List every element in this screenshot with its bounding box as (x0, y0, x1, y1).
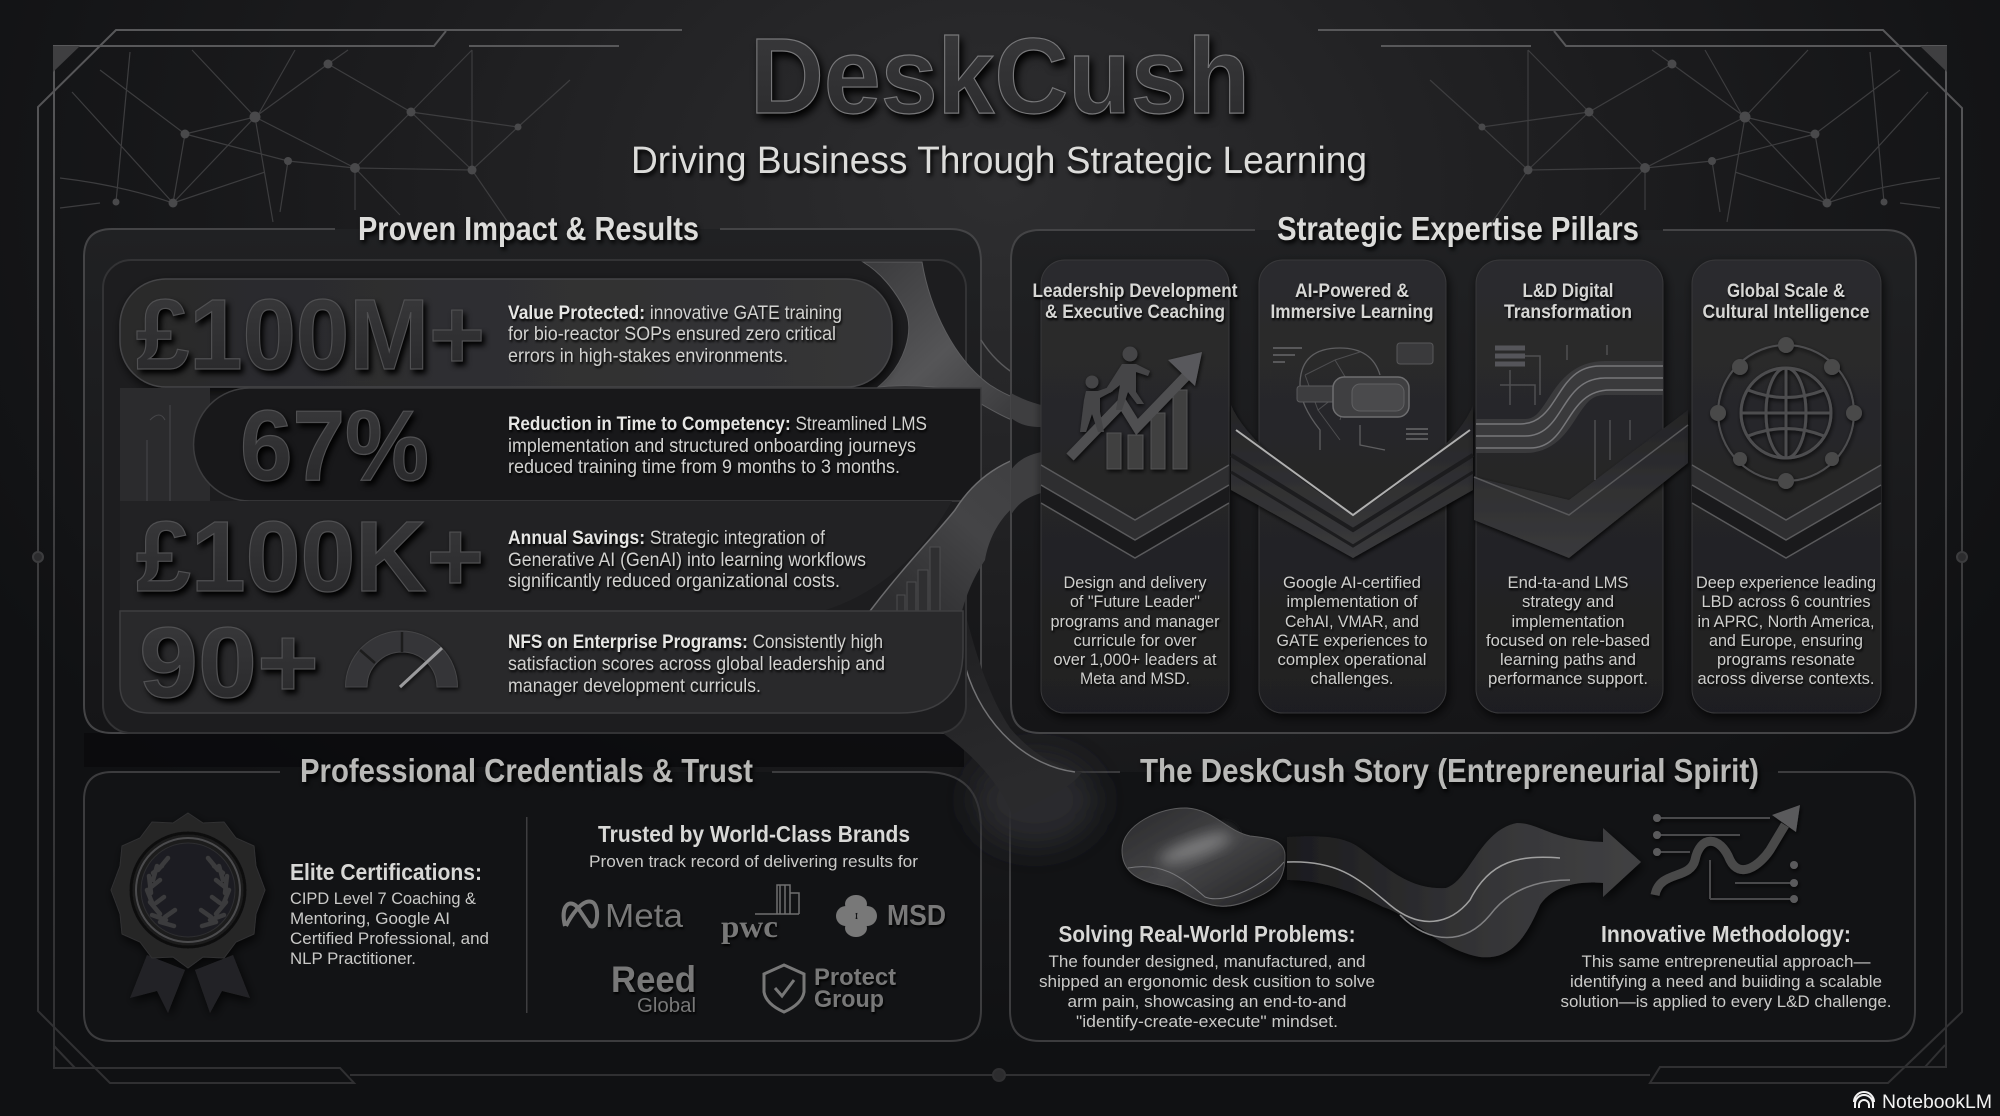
card description: Design and delivery (1064, 573, 1207, 592)
logo: Reed Global: Global (637, 995, 696, 1017)
row: time to competency: reduced training time from 9 months to 3 months. (508, 457, 900, 478)
metric: 100K: £100K+ (136, 501, 484, 613)
row: value protected (120, 279, 892, 391)
icon: award rosette (111, 813, 265, 1013)
card title: L&D Digital (1522, 281, 1614, 302)
logo: Meta (564, 897, 684, 934)
card title: Global Scale & (1727, 281, 1845, 302)
logo: Reed Global: Reed (611, 959, 696, 1000)
heading: proven impact: Proven Impact & Results (358, 210, 699, 247)
icon: globe network (1710, 337, 1862, 489)
heading: pillars: Strategic Expertise Pillars (1277, 210, 1639, 247)
card: digital transformation: strategy and (1522, 592, 1614, 611)
card: leadership development: curricule for over (1074, 631, 1197, 650)
panel outline (84, 229, 981, 733)
row: value protected: errors in high-stakes environments. (508, 346, 788, 367)
card: leadership development: & Executive Ceaching (1045, 302, 1225, 323)
row: annual savings: Generative AI (GenAI) into learning workflows (508, 550, 866, 571)
panel: the DeskCush story (973, 752, 1915, 1041)
card: global scale: across diverse contexts. (1698, 669, 1874, 688)
metric: 90 plus: 90+ (139, 607, 319, 719)
text: solving real-world problems: arm pain, showcasing an end-to-and (1068, 992, 1346, 1011)
text: elite certifications: CIPD Level 7 Coaching & (290, 889, 477, 908)
card: AI-powered learning: implementation of (1286, 592, 1418, 611)
logo: PwC (721, 885, 799, 944)
card description: End-ta-and LMS (1508, 573, 1628, 592)
text: trusted brands: Proven track record of delivering results for (589, 852, 918, 871)
logo: Meta: Meta (605, 897, 684, 934)
panel: proven impact and results (84, 210, 1082, 815)
description: value protected: Value Protected: innovative GATE training (508, 303, 842, 324)
card: digital transformation: performance support. (1488, 669, 1648, 688)
decorative network: top right (1430, 50, 1940, 240)
icon: ergonomic cushion (1122, 808, 1285, 906)
text: trusted brands: Trusted by World-Class Brands (598, 821, 910, 847)
panel outline (84, 772, 981, 1041)
card: digital transformation: focused on rele-based (1486, 631, 1650, 650)
soft sheen where connector meets the story panel (973, 754, 1097, 846)
card: digital transformation: Transformation (1504, 302, 1632, 323)
panel: professional credentials and trust (84, 752, 981, 1041)
chevron band (1474, 410, 1688, 558)
panel outline (1011, 230, 1916, 733)
text: innovative methodology: solution—is applied to every L&D challenge. (1560, 992, 1892, 1011)
icon: VR headset with wireframe head (1273, 343, 1433, 450)
heading: story: The DeskCush Story (Entrepreneurial Spirit) (1140, 752, 1759, 789)
chevrons (1692, 465, 1881, 540)
text: innovative methodology: This same entrepreneutial approach— (1582, 952, 1870, 971)
swoosh: lower connector tail (917, 600, 1082, 815)
card: digital transformation: implementation (1512, 612, 1624, 631)
card: AI-powered learning (1231, 260, 1473, 713)
text: solving real-world problems: shipped an ergonomic desk cusition to solve (1039, 972, 1375, 991)
description: annual savings: Annual Savings: Strategic integration of (508, 528, 826, 549)
text: trusted brands (589, 821, 918, 871)
card: global scale: Cultural Intelligence (1702, 302, 1870, 323)
text: elite certifications: Mentoring, Google AI (290, 909, 450, 928)
results plate (103, 260, 966, 733)
text: innovative methodology: Innovative Methodology: (1601, 921, 1851, 947)
card: AI-powered learning: challenges. (1310, 669, 1394, 688)
card: digital transformation: learning paths and (1500, 650, 1636, 669)
panel: strategic expertise pillars (1011, 210, 1916, 733)
row: annual savings (120, 501, 952, 613)
card: global scale: programs resonate (1717, 650, 1855, 669)
card: leadership development: over 1,000+ leaders at (1054, 650, 1217, 669)
row: time to competency: implementation and structured onboarding journeys (508, 436, 916, 457)
card: leadership development: programs and manager (1050, 612, 1220, 631)
subtitle: Driving Business Through Strategic Learning (631, 140, 1367, 182)
metric: 100M: £100M+ (136, 279, 485, 391)
card description: Deep experience leading (1696, 573, 1876, 592)
metric: 67 percent: 67% (240, 390, 429, 502)
chevrons (1041, 465, 1229, 540)
title: DeskCush (750, 15, 1250, 136)
text: innovative methodology (1560, 921, 1892, 1011)
swoosh highlight (963, 657, 1075, 772)
logo: MSD: MSD (887, 900, 946, 932)
swoosh stubs overlapping panel (1011, 393, 1041, 515)
card: global scale: LBD across 6 countries (1702, 592, 1870, 611)
text: elite certifications (290, 859, 489, 968)
card description: Google AI-certified (1283, 573, 1421, 592)
swoosh: connector to pillars (863, 262, 1041, 427)
card title: AI-Powered & (1295, 281, 1409, 302)
heading: credentials: Professional Credentials & Trust (300, 752, 753, 789)
logo: MSD (836, 895, 946, 937)
shadow beneath results panel (84, 733, 964, 767)
logo: PwC: pwc (721, 908, 778, 944)
text: solving real-world problems: Solving Real-World Problems: (1058, 921, 1356, 947)
card: global scale: in APRC, North America, (1698, 612, 1874, 631)
text: elite certifications: Elite Certifications: (290, 859, 482, 885)
card: AI-powered learning: Immersive Learning (1270, 302, 1434, 323)
card: leadership development: Meta and MSD. (1080, 669, 1190, 688)
text: solving real-world problems: "identify-create-execute" mindset. (1076, 1012, 1338, 1031)
logo: Protect Group: Group (814, 986, 884, 1013)
card: leadership development: of "Future Leader" (1070, 592, 1200, 611)
icon: small bars (897, 547, 940, 611)
card: AI-powered learning: GATE experiences to (1276, 631, 1428, 650)
icon: methodology arrow (1653, 805, 1800, 903)
row: NPS (120, 607, 963, 719)
row: value protected: for bio-reactor SOPs ensured zero critical (508, 324, 836, 345)
text: innovative methodology: identifying a need and buiiding a scalable (1570, 972, 1882, 991)
row: NPS: satisfaction scores across global leadership and (508, 654, 885, 675)
card: AI-powered learning: CehAI, VMAR, and (1285, 612, 1419, 631)
chevron band (1231, 405, 1473, 558)
text: elite certifications: Certified Professional, and (290, 929, 489, 948)
swoosh: curved band from pillars into results (870, 452, 1041, 611)
description: NPS: NFS on Enterprise Programs: Consistently high (508, 632, 883, 653)
icon: data pipelines (1476, 345, 1663, 480)
card: global scale: and Europe, ensuring (1709, 631, 1863, 650)
row: NPS: manager development curriculs. (508, 676, 761, 697)
icon: gauge (346, 631, 458, 687)
arrow: flowing wave (1287, 823, 1641, 957)
description: time to competency: Reduction in Time to Competency: Streamlined LMS (508, 414, 927, 435)
icon: climbing figures and rising arrow (1070, 346, 1202, 469)
card: global scale (1692, 260, 1881, 713)
logo: Protect Group (764, 964, 896, 1013)
text: solving real-world problems (1039, 921, 1375, 1031)
card: digital transformation (1474, 260, 1688, 713)
card: AI-powered learning: complex operational (1278, 650, 1426, 669)
NotebookLM mark: NotebookLM (1882, 1092, 1992, 1113)
card: leadership development (1032, 260, 1238, 713)
row: time to competency (120, 388, 981, 502)
row: annual savings: significantly reduced organizational costs. (508, 571, 840, 592)
text: solving real-world problems: The founder designed, manufactured, and (1048, 952, 1366, 971)
logo: Reed Global (611, 959, 696, 1017)
logo: Protect Group: Protect (814, 964, 896, 991)
text: elite certifications: NLP Practitioner. (290, 949, 416, 968)
panel outline (1010, 772, 1915, 1041)
card title: Leadership Development (1032, 281, 1238, 302)
decorative network: top left (60, 50, 570, 240)
